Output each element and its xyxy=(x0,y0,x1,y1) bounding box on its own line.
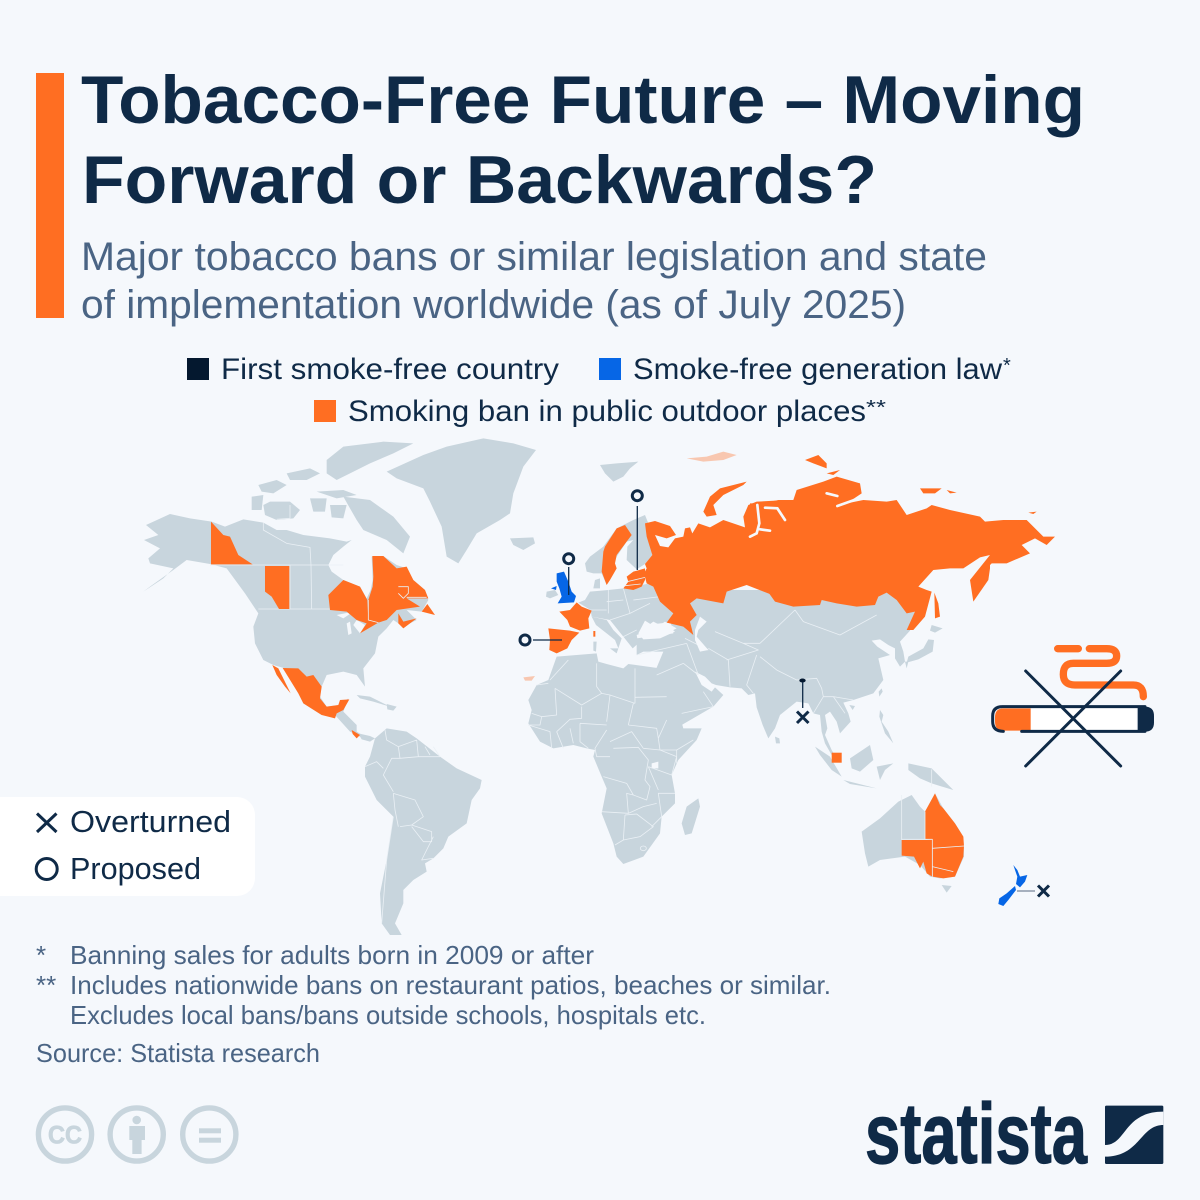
footnotes: Banning sales for adults born in 2009 or after xyxy=(70,940,594,970)
subtitle xyxy=(81,235,987,327)
marker: proposed uk xyxy=(564,554,574,595)
subtitle: of implementation worldwide (as of July 2025) xyxy=(81,283,906,327)
country: united kingdom xyxy=(551,572,576,603)
marker: proposed estonia xyxy=(632,491,642,570)
color legend xyxy=(187,353,1011,428)
statista logo xyxy=(865,1087,1163,1182)
footnotes xyxy=(36,940,831,1030)
subtitle: Major tobacco bans or similar legislation and state xyxy=(81,235,987,279)
title: Forward or Backwards? xyxy=(82,142,877,218)
wordmark: statista xyxy=(865,1087,1088,1182)
footnotes: ** xyxy=(36,970,56,1000)
borders: asia xyxy=(637,610,877,713)
land: greenland xyxy=(387,438,536,563)
legend: smoke-free generation law: Smoke-free generation law xyxy=(633,353,1002,386)
land: europe xyxy=(510,462,680,653)
title xyxy=(81,62,1085,218)
footnotes: * xyxy=(36,940,46,970)
no-derivatives badge xyxy=(183,1108,236,1161)
panel: marker legend xyxy=(0,797,255,896)
legend: proposed: Proposed xyxy=(70,851,201,886)
cigarette body xyxy=(993,707,1154,732)
logo mark xyxy=(1105,1106,1163,1164)
cross xyxy=(1026,671,1121,766)
country: new zealand xyxy=(998,865,1027,906)
land: japan xyxy=(905,625,943,668)
country: canada provinces, mexico, costa rica xyxy=(211,522,435,738)
cc badge: CC xyxy=(48,1122,82,1150)
land: africa and south america xyxy=(358,653,702,935)
marker: proposed spain xyxy=(520,635,562,645)
land: north america xyxy=(143,438,536,740)
marker: overturned bhutan xyxy=(797,682,808,723)
country: russia east xyxy=(750,455,1055,630)
accent bar xyxy=(36,73,64,318)
legend: outdoor smoking ban: Smoking ban in public outdoor places xyxy=(348,395,866,428)
legend: overturned: Overturned xyxy=(70,804,231,839)
marker: overturned new zealand xyxy=(1017,886,1049,896)
legend: smoke-free generation law: * xyxy=(1003,355,1011,377)
footnotes: Includes nationwide bans on restaurant patios, beaches or similar. xyxy=(70,970,831,1000)
attribution badge xyxy=(110,1108,163,1161)
country: singapore xyxy=(832,753,842,763)
source: Source: Statista research xyxy=(36,1038,320,1068)
country: russia west, sweden, baltics, france, spain xyxy=(523,452,793,681)
legend: outdoor smoking ban: ** xyxy=(866,397,886,419)
footnotes: Excludes local bans/bans outside schools, hospitals etc. xyxy=(70,1000,706,1030)
smoke xyxy=(1058,649,1143,697)
country: australia states xyxy=(902,769,964,878)
title: Tobacco-Free Future – Moving xyxy=(81,62,1085,138)
world map xyxy=(143,438,1055,935)
land: asia xyxy=(637,580,917,758)
seas: black sea and caspian xyxy=(695,617,708,652)
borders: europe and north america xyxy=(590,588,660,637)
legend: first smoke-free country: First smoke-free country xyxy=(221,353,559,386)
icon: creative commons xyxy=(38,1108,236,1161)
borders: africa and south america xyxy=(528,660,693,845)
cc badge xyxy=(38,1108,92,1161)
country: bhutan xyxy=(799,678,806,682)
land: southeast asia and oceania xyxy=(815,745,964,893)
icon: crossed-out cigarette xyxy=(993,649,1154,766)
